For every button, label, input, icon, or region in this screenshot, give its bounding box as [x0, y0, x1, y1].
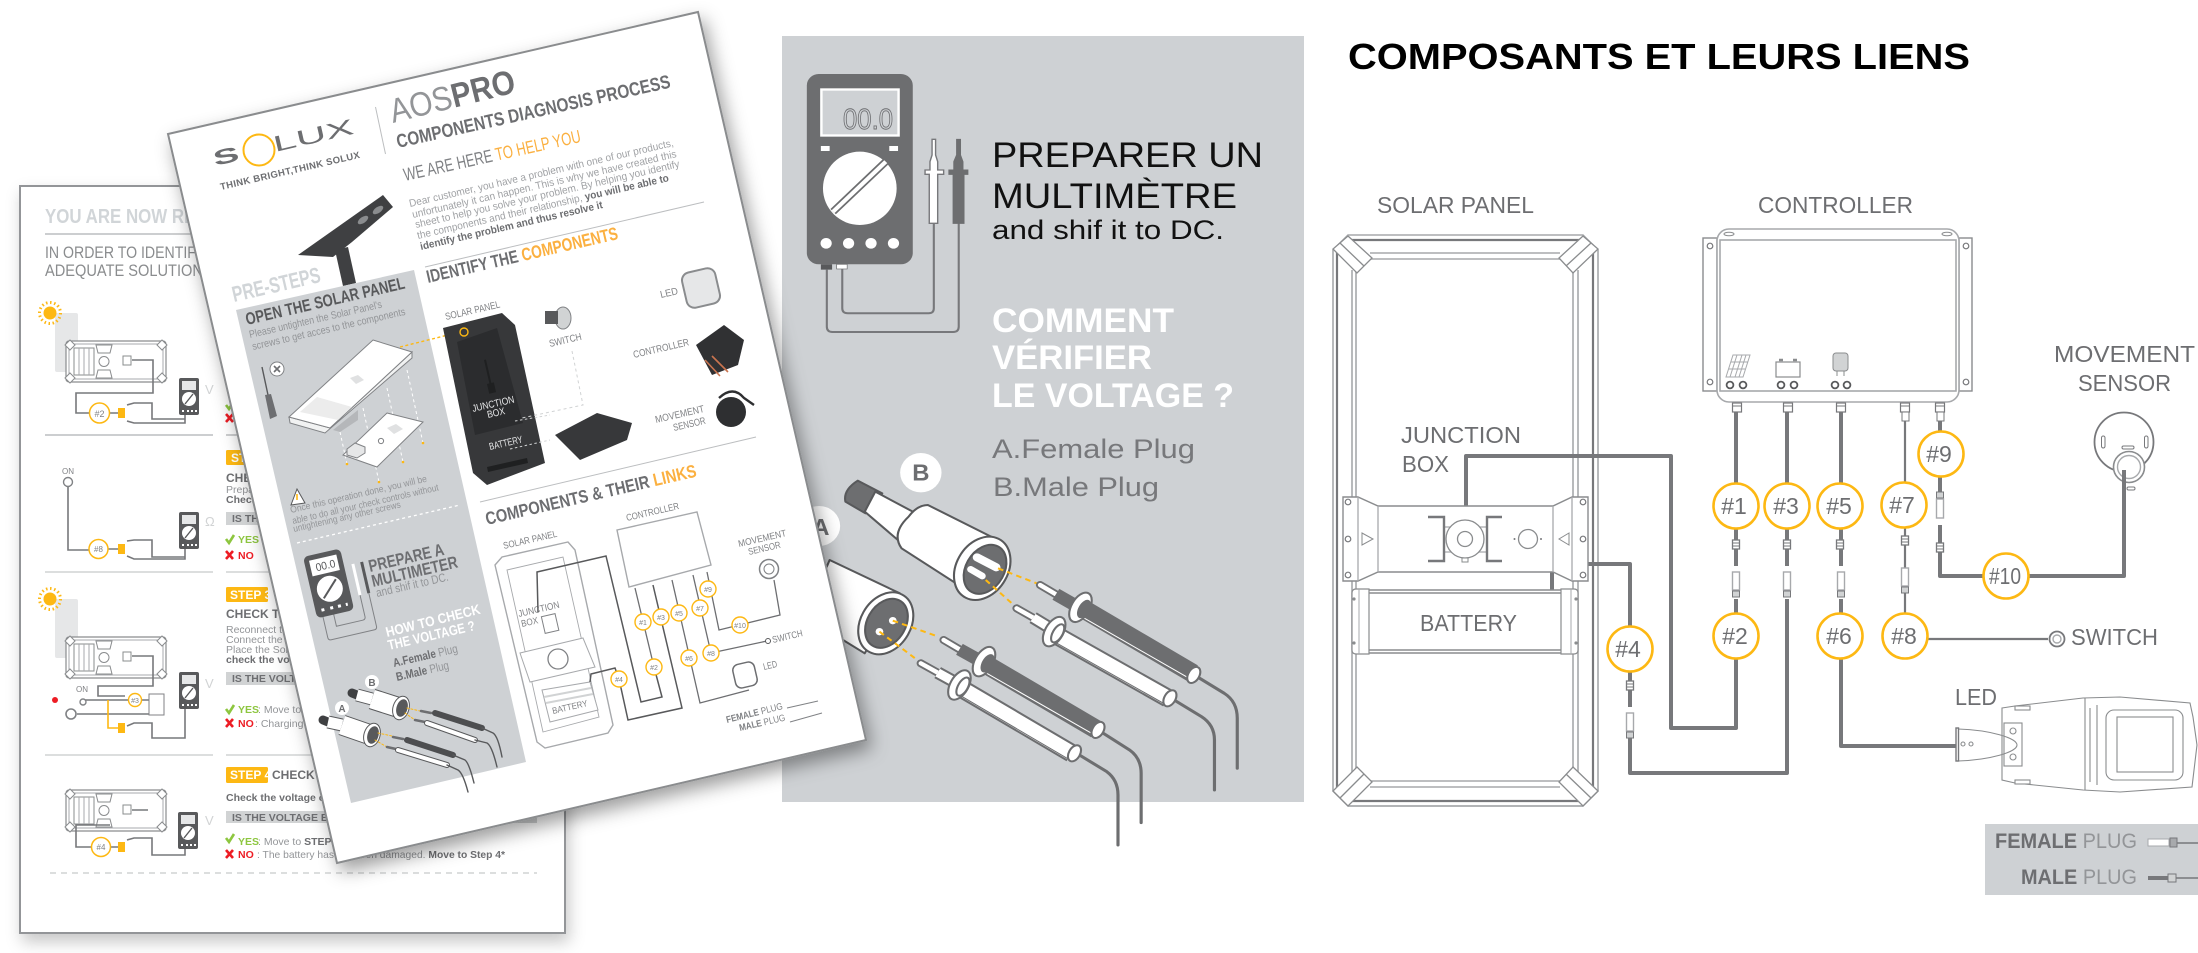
- connector #1: #1: [1721, 493, 1747, 519]
- text: plug legend: B.Male Plug: [993, 472, 1159, 502]
- icon: battery: [1776, 360, 1800, 377]
- mini wiring diagram: SENSOR: [747, 540, 782, 558]
- component: switch: SWITCH: [548, 332, 583, 350]
- mini wiring diagram: BATTERY: [551, 698, 589, 716]
- subtitle: COMPONENTS DIAGNOSIS PROCESS: [395, 72, 672, 153]
- mini wiring diagram: SWITCH: [771, 628, 804, 646]
- heading: how to check the voltage: THE VOLTAGE ?: [386, 617, 476, 653]
- diagram: step 4 battery test: #4: [97, 843, 106, 852]
- intro paragraph: [408, 137, 681, 253]
- logo: solux: THINK BRIGHT,THINK SOLUX: [219, 150, 362, 193]
- text: plug names: [392, 641, 459, 684]
- badge A: [798, 506, 840, 546]
- connector #10: [1984, 554, 2028, 598]
- icon: black solar unit: JUNCTION: [471, 395, 516, 415]
- intro paragraph: sheet to help you solve your problem. By helping you identify: [414, 158, 681, 231]
- diagram: step 2 switch test: [45, 467, 300, 572]
- connector #8: [1882, 614, 1928, 658]
- rear sheet heading: YOU ARE NOW READY: [45, 206, 232, 228]
- probe bodies: [958, 607, 1193, 759]
- mini legend: [725, 701, 822, 734]
- text: warning note: Once this operation done, you will be: [289, 474, 428, 516]
- mini legend: MALE PLUG: [738, 713, 786, 734]
- panel: front sheet, AOS PRO: [168, 12, 866, 863]
- step 2 text: Check: [226, 494, 258, 506]
- wire: connector 7 and 8: [1905, 420, 2048, 639]
- step 2 text: YES: [238, 534, 259, 546]
- step 3 text: : Charging: [255, 718, 304, 730]
- label: battery: BATTERY: [1420, 610, 1517, 636]
- heading: prepare a multimeter: and shif it to DC.: [375, 570, 450, 600]
- diagram: step 2 test: [40, 302, 300, 435]
- label: controller: CONTROLLER: [1758, 192, 1913, 218]
- icon: movement sensor: [2094, 412, 2154, 490]
- mini wiring diagram: #2: [650, 665, 658, 672]
- step 2 text: IS THE: [232, 513, 266, 525]
- connector #2: [1714, 614, 1758, 658]
- connector #7: [1882, 482, 1926, 528]
- connector #4: #4: [1615, 636, 1641, 662]
- heading: prepare a multimeter: MULTIMÈTRE: [992, 177, 1237, 216]
- text: plug names: A.Female Plug: [392, 641, 459, 670]
- heading: prepare a multimeter: [992, 136, 1263, 245]
- icon: led lamp: [1833, 353, 1848, 376]
- diagram: step 2 switch test: #8: [94, 545, 103, 554]
- connector #2: #2: [1722, 623, 1748, 649]
- connector #5: #5: [1826, 493, 1852, 519]
- icon: black solar unit: BATTERY: [488, 435, 524, 453]
- probe tips and necks: [921, 585, 1075, 683]
- diagram: junction box: [1343, 497, 1588, 581]
- rear sheet intro: [45, 243, 237, 280]
- step 3 text: check the voltage: [226, 654, 314, 666]
- heading: how to check the voltage: HOW TO CHECK: [384, 601, 482, 640]
- heading: how to check the voltage: LE VOLTAGE ?: [992, 377, 1234, 415]
- label: movement sensor: MOVEMENT: [2054, 341, 2195, 367]
- wire: battery to connector 4 and 3: [1552, 564, 1787, 773]
- wire: connector 9 and 10: [1940, 420, 2124, 576]
- intro paragraph: Dear customer, you have a problem with one of our products,: [408, 137, 675, 210]
- diagram: step 2 switch test: ON: [62, 467, 74, 476]
- connector #5: [1818, 484, 1862, 528]
- step 3 text: NO: [238, 718, 254, 730]
- male plug: [845, 481, 1022, 609]
- mini wiring diagram: #6: [685, 656, 693, 663]
- connector plugs: [1626, 403, 1944, 738]
- component: movement sensor: [654, 392, 754, 434]
- title: COMPOSANTS ET LEURS LIENS: [1348, 36, 1970, 77]
- icon: small plugs and probes: A: [338, 704, 346, 715]
- diagram: step 2 test: #2: [94, 409, 105, 419]
- wire: connector 4 lower: [1628, 672, 1632, 707]
- heading: how to check the voltage: VÉRIFIER: [992, 339, 1152, 377]
- connector #4: [1608, 626, 1652, 672]
- component: movement sensor: SENSOR: [672, 416, 707, 434]
- icon: black solar unit: BOX: [486, 406, 506, 421]
- step 4 text: NO: [238, 849, 254, 861]
- rear sheet intro: ADEQUATE SOLUTION,: [45, 261, 207, 280]
- connector #9: [1918, 432, 1964, 476]
- heading: prepare a multimeter: PREPARER UN: [992, 136, 1263, 175]
- heading: components and their links: COMPONENTS & THEIR LINKS: [483, 461, 698, 529]
- solar panel label: SOLAR PANEL: [444, 300, 502, 323]
- label: movement sensor: SENSOR: [2078, 370, 2171, 396]
- mini wiring diagram: #5: [675, 611, 683, 618]
- connector #6: #6: [1826, 623, 1852, 649]
- icon: small plugs and probes: B: [368, 678, 376, 689]
- heading: open the solar panel: OPEN THE SOLAR PANEL: [244, 274, 407, 329]
- step 3 text: YES: [238, 704, 259, 716]
- step 4 text: : Move to STEP 5: [258, 836, 340, 848]
- connector #8: #8: [1891, 623, 1917, 649]
- title: AOS PRO: AOSPRO: [386, 63, 519, 131]
- step 3 text: Connect the mo: [226, 634, 300, 646]
- label: junction box: JUNCTION: [1401, 422, 1521, 448]
- diagram: step 4 battery test: [65, 789, 214, 856]
- logo: solux: S: [211, 143, 241, 171]
- icon: plugs and probes: [798, 453, 1237, 845]
- text: open instructions: screws to get acces to the components: [251, 306, 407, 353]
- step 4 text: : The battery has not been damaged. Move to Step 4*: [257, 849, 506, 861]
- label: led: LED: [1955, 684, 1997, 710]
- probe collars and caps: [943, 589, 1203, 763]
- diagram: battery: [1352, 589, 1578, 654]
- icon: street lamp: [298, 195, 393, 286]
- icon: female plug: [2148, 838, 2198, 847]
- badge B: [900, 453, 942, 492]
- female plug: [805, 560, 924, 663]
- step 3 text: : Move to STEP: [258, 704, 332, 716]
- icon: small multimeter: 00.0: [315, 558, 337, 574]
- heading: how to check the voltage: [992, 302, 1234, 415]
- mini wiring diagram: #3: [657, 615, 665, 622]
- connector #9: #9: [1926, 441, 1952, 467]
- text: plug legend: A.Female Plug: [992, 434, 1195, 464]
- connector #1: [1714, 484, 1758, 528]
- badge A: A: [812, 515, 830, 540]
- text: open instructions: Please untighten the Solar Panel's: [248, 299, 383, 341]
- component: battery pack: [555, 413, 632, 460]
- icon: led lamp: [1956, 697, 2197, 792]
- step 4 text: YES: [238, 836, 259, 848]
- icon: solar tile: [1726, 355, 1750, 377]
- label: junction box: [1401, 422, 1521, 477]
- mini wiring diagram: [495, 501, 804, 748]
- diagram: controller: [1703, 229, 1972, 402]
- component: led: [659, 267, 722, 309]
- mini wiring diagram: #7: [696, 606, 704, 613]
- connector #6: [1818, 614, 1862, 658]
- connector #7: #7: [1889, 492, 1915, 518]
- heading: prepare a multimeter: [367, 540, 460, 600]
- label: junction box: BOX: [1402, 451, 1449, 477]
- heading: prepare a multimeter: and shif it to DC.: [992, 215, 1224, 245]
- step 3 text: CHECK THE: [226, 607, 296, 621]
- diagram: step 2 switch test: Ω: [205, 514, 215, 529]
- step 4 text: [226, 768, 537, 861]
- icon: black solar unit: [443, 313, 550, 485]
- icon: switch: [2050, 632, 2064, 646]
- heading: pre-steps: PRE-STEPS: [230, 262, 323, 307]
- mini wiring diagram: #8: [707, 651, 715, 658]
- step 3 text: IS THE VOLTAGE: [232, 673, 318, 685]
- badge B: B: [912, 460, 929, 486]
- component: led: LED: [659, 286, 679, 301]
- wire: controller to connectors: [1736, 412, 1956, 746]
- heading: how to check the voltage: [384, 601, 482, 653]
- component: controller: [632, 325, 744, 376]
- connector #3: [1764, 484, 1810, 528]
- diagram: step 3 controller test: #3: [131, 698, 139, 705]
- step 4 text: IS THE VOLTAGE BETWEEN: [232, 812, 373, 824]
- step 4 tag: STEP 4: [230, 768, 271, 782]
- mini wiring diagram: #1: [639, 620, 647, 627]
- intro paragraph: the components and their relationship, you will be able to: [416, 172, 670, 242]
- label: switch: SWITCH: [2071, 624, 2158, 650]
- intro paragraph: unfortunately it can happen. This is why we have created this: [411, 148, 678, 221]
- icon: screwdriver: [262, 362, 284, 419]
- heading: prepare a multimeter: PREPARE A: [367, 540, 446, 576]
- text: plug legend: [992, 434, 1195, 502]
- text: warning note: untightening any other screws: [292, 499, 402, 535]
- step 2 text: [226, 471, 326, 562]
- icon: male plug: [2148, 874, 2198, 882]
- diagram: step 3 controller test: [40, 588, 320, 755]
- mini wiring diagram: #10: [734, 623, 746, 630]
- text: warning note: able to do all your check controls without: [291, 482, 440, 527]
- heading: prepare a multimeter: MULTIMETER: [370, 553, 460, 591]
- text: plug names: B.Male Plug: [395, 658, 450, 684]
- dashed guides: [879, 568, 1037, 660]
- step 2 text: Prepare: [226, 484, 264, 496]
- component: controller: CONTROLLER: [632, 337, 690, 361]
- heading: we are here to help you: WE ARE HERE TO HELP YOU: [402, 126, 583, 185]
- logo: solux: LUX: [271, 114, 357, 157]
- legend: plug types: MALE PLUG: [2021, 866, 2137, 889]
- rear sheet intro: IN ORDER TO IDENTIFY THE: [45, 243, 237, 262]
- step 3 tag: STEP 3: [230, 588, 271, 602]
- mini wiring diagram: #9: [704, 587, 712, 594]
- diagram: step 4 battery test: V: [205, 813, 214, 828]
- mini wiring diagram: CONTROLLER: [625, 501, 680, 524]
- heading: identify the components: IDENTIFY THE COMPONENTS: [424, 223, 620, 287]
- multimeter reading: 00.0: [843, 104, 893, 136]
- mini wiring diagram: BOX: [520, 615, 540, 630]
- step 3 text: [226, 607, 336, 730]
- step 2 text: NO: [238, 550, 254, 562]
- legend: plug types: [1985, 824, 2198, 895]
- label: movement sensor: [2054, 341, 2195, 396]
- mini wiring diagram: MOVEMENT: [737, 528, 788, 550]
- step 4 text: Check the voltage of the battery: [226, 792, 385, 804]
- step 2 text: CHECK: [226, 471, 269, 485]
- heading: how to check the voltage: COMMENT: [992, 302, 1174, 340]
- legend: plug types: FEMALE PLUG: [1995, 830, 2137, 853]
- panel: multimeter and voltage check: [782, 36, 1304, 802]
- panel: rear sheet, steps: [20, 186, 565, 933]
- icon: large multimeter: [807, 74, 968, 332]
- icon: warning: [291, 489, 305, 505]
- mini wiring diagram: #4: [615, 677, 623, 684]
- step 4 text: CHECK THE: [272, 768, 342, 782]
- icon: open solar panel: [289, 340, 424, 483]
- logo: solux: [211, 114, 362, 193]
- step 2 tag: STEP 2: [231, 451, 272, 465]
- diagram: step 3 controller test: V: [205, 676, 214, 691]
- label: solar panel: SOLAR PANEL: [1377, 192, 1534, 218]
- component: movement sensor: MOVEMENT: [654, 404, 705, 426]
- step 3 text: Reconnect the: [226, 624, 294, 636]
- panel: pre-steps: [230, 262, 526, 803]
- diagram: step 2 test: V: [205, 382, 214, 397]
- connector #10: #10: [1989, 563, 2021, 589]
- mini legend: FEMALE PLUG: [725, 701, 784, 726]
- step 3 text: Place the Solar P: [226, 644, 307, 656]
- diagram: solar panel frame: [1333, 235, 1598, 806]
- intro paragraph: identify the problem and thus resolve it: [419, 199, 604, 253]
- probe cables: [1080, 678, 1237, 845]
- mini wiring diagram: JUNCTION: [517, 600, 561, 620]
- connector #3: #3: [1773, 493, 1799, 519]
- mini wiring diagram: LED: [762, 659, 778, 673]
- icon: small multimeter: [303, 544, 377, 642]
- component: switch: [522, 307, 583, 418]
- diagram: step 3 controller test: ON: [76, 685, 88, 694]
- wire: junction box to connector 2: [1466, 456, 1736, 728]
- icon: small plugs and probes: [323, 675, 502, 792]
- mini wiring diagram: SOLAR PANEL: [502, 529, 558, 552]
